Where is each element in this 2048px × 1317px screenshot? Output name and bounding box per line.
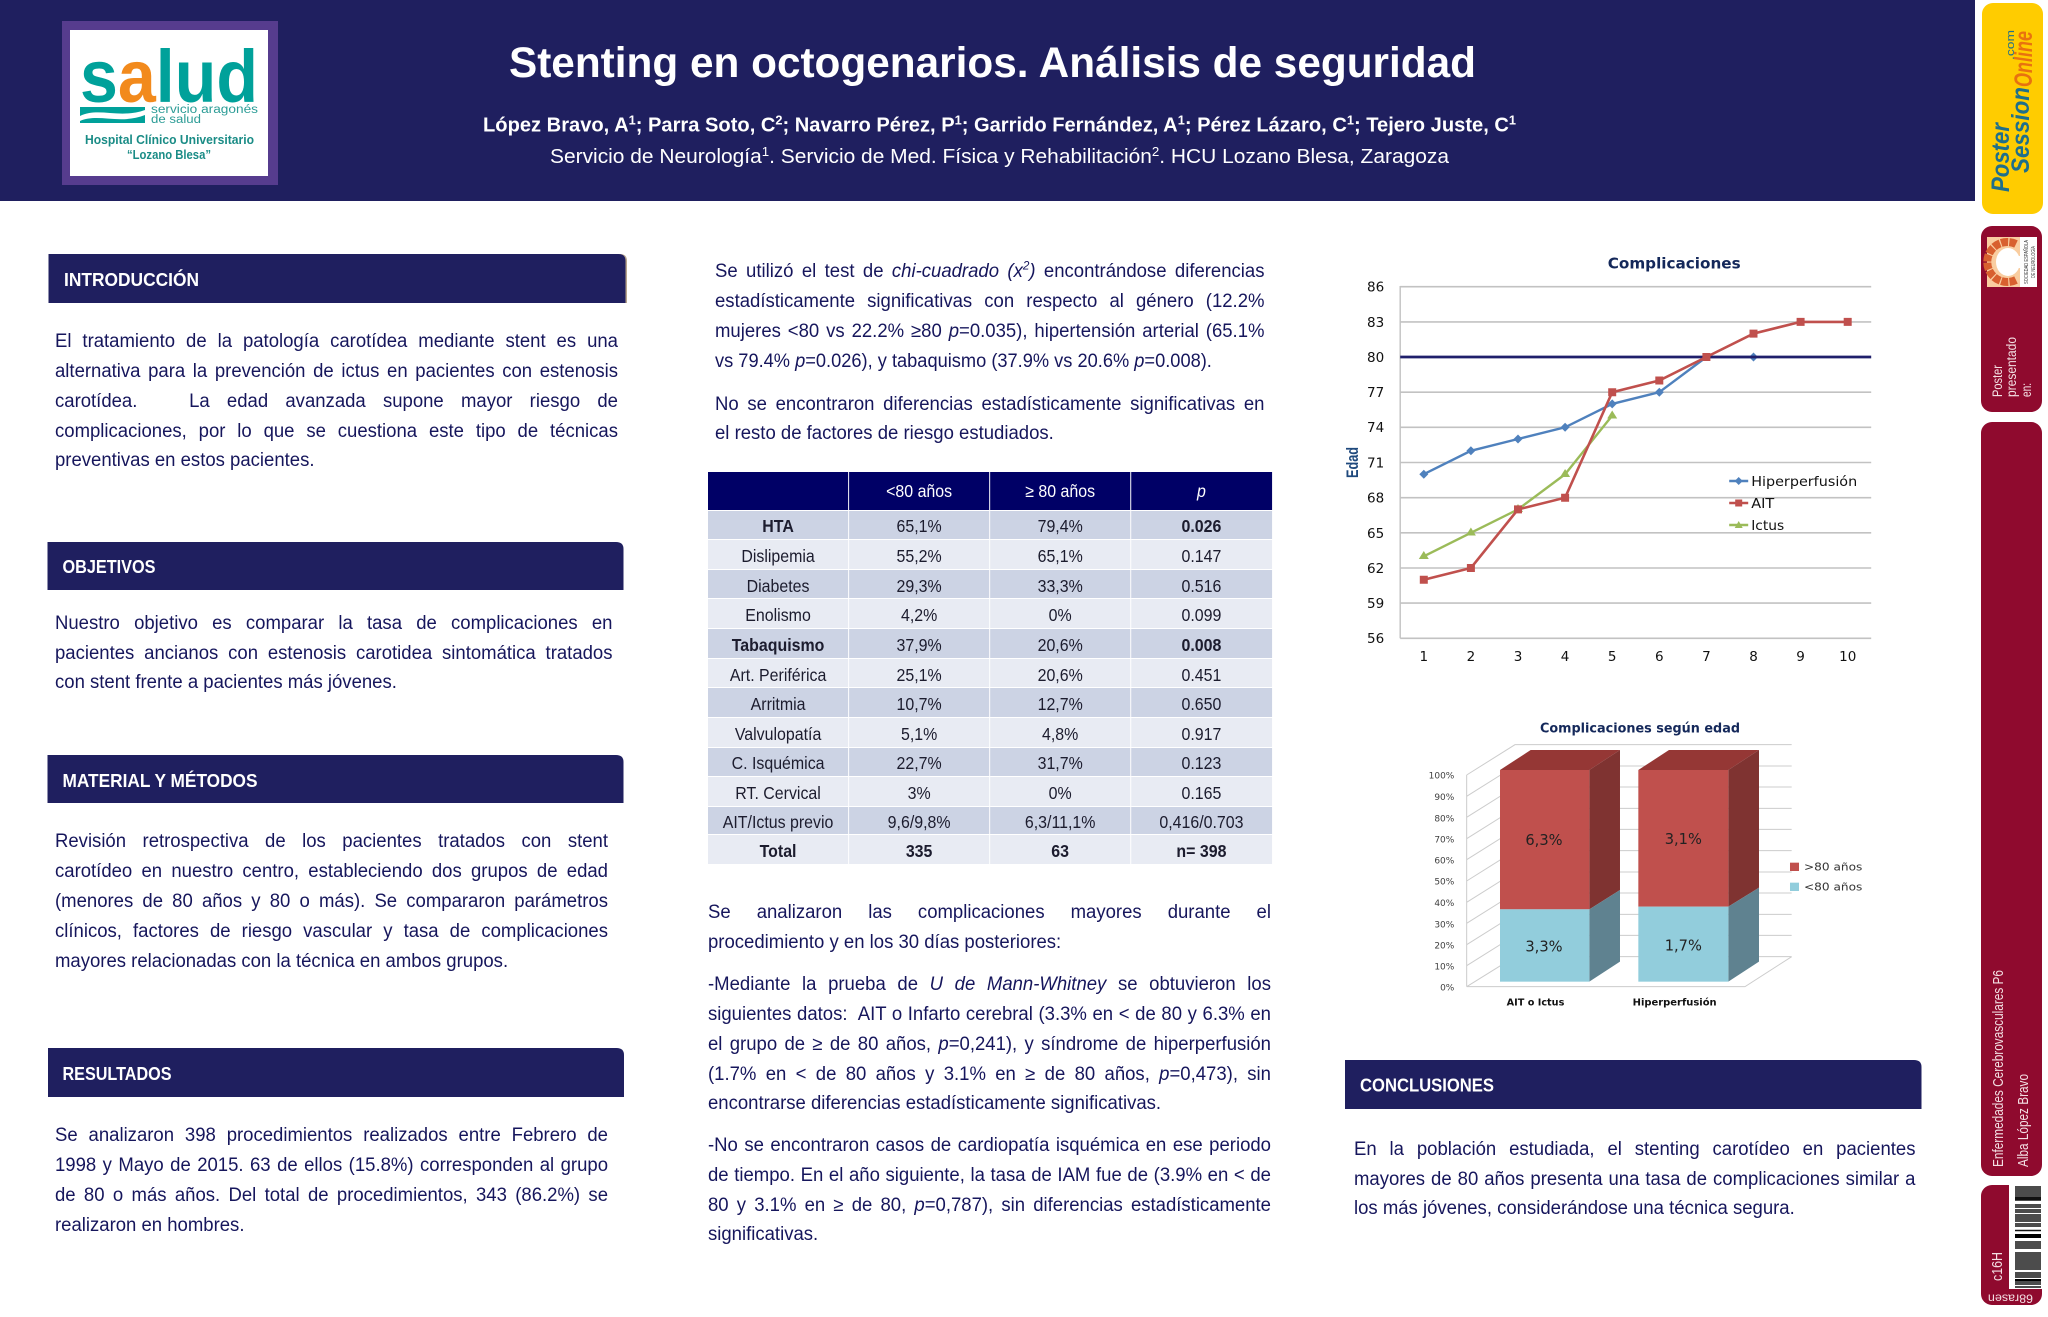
authors: 1 xyxy=(1347,112,1354,128)
table: risk factors by age group: 33,3% xyxy=(1037,576,1082,596)
sidebar: Poster Session Online badge: Session xyxy=(2007,87,2035,173)
authors: 1 xyxy=(629,112,636,128)
bar: Hiperperfusión xyxy=(1638,750,1759,982)
table: risk factors by age group: 25,1% xyxy=(896,665,941,685)
table: risk factors by age group: 0.917 xyxy=(1181,724,1221,744)
text: resultados: 1998 y Mayo de 2015. 63 de ellos (15.8%) corresponden al grupo xyxy=(55,1155,608,1176)
y axis labels: 50% xyxy=(1434,878,1455,888)
text: conclusiones: mayores de 80 años presenta una tasa de complicaciones similar a xyxy=(1354,1169,1915,1190)
icon: salud hospital logo: Hospital Clínico Universitario xyxy=(85,132,254,147)
text: introducción: preventivas en estos pacientes. xyxy=(55,450,315,471)
text: introducción: carotídea. La edad avanzada supone mayor riesgo de xyxy=(55,391,618,412)
table: risk factors by age group: ≥ 80 años xyxy=(1025,481,1095,501)
text: objetivos: Nuestro objetivo es comparar la tasa de complicaciones en xyxy=(55,613,612,634)
text: chi-cuadrado results: el resto de factores de riesgo estudiados. xyxy=(715,423,1053,444)
y axis labels: 59 xyxy=(1367,596,1384,612)
y axis labels: 60% xyxy=(1434,857,1455,867)
text: major complications: -No se encontraron casos de cardiopatía isquémica en ese periodo xyxy=(708,1135,1270,1156)
text: chi-cuadrado results: Se utilizó el test de chi-cuadrado (x2) encontrándose diferencias xyxy=(715,259,1264,282)
y axis labels: 71 xyxy=(1367,456,1384,472)
table: risk factors by age group: 63 xyxy=(1051,841,1069,861)
y axis labels: 80 xyxy=(1367,350,1384,366)
table: risk factors by age group: 5,1% xyxy=(900,724,937,744)
text: chi-cuadrado results: vs 79.4% p=0.026), y tabaquismo (37.9% vs 20.6% p=0.008). xyxy=(715,350,1212,372)
sidebar: Poster Session Online badge: Poster xyxy=(1987,122,2015,192)
y axis labels: 56 xyxy=(1367,631,1384,647)
legend: AIT xyxy=(1751,496,1775,512)
y axis labels: 90% xyxy=(1434,793,1455,803)
table: risk factors by age group: 10,7% xyxy=(896,694,941,714)
text: conclusiones: En la población estudiada, el stenting carotídeo en pacientes xyxy=(1354,1139,1915,1160)
table: risk factors by age group: 0.165 xyxy=(1181,783,1221,803)
y axis labels: 100% xyxy=(1429,772,1455,782)
bar: AIT o Ictus: 3,3% xyxy=(1525,938,1563,955)
table: risk factors by age group: Diabetes xyxy=(746,576,809,596)
table: risk factors by age group: n= 398 xyxy=(1176,841,1226,861)
authors: ; Navarro Pérez, P xyxy=(782,114,955,136)
y axis labels xyxy=(1367,280,1384,647)
text: introducción: El tratamiento de la patología carotídea mediante stent es una xyxy=(55,331,618,352)
icon: salud hospital logo: salud xyxy=(80,35,258,118)
x axis labels: 7 xyxy=(1702,649,1711,665)
authors: ; Pérez Lázaro, C xyxy=(1185,114,1347,136)
authors: 1 xyxy=(1178,112,1185,128)
text: conclusiones: los más jóvenes, considerándose una técnica segura. xyxy=(1354,1198,1794,1219)
bar: Hiperperfusión: 1,7% xyxy=(1665,937,1702,954)
authors: ; Garrido Fernández, A xyxy=(962,114,1178,136)
text: resultados xyxy=(55,1125,608,1236)
text: introducción: alternativa para la prevención de ictus en pacientes con estenosis xyxy=(55,361,618,382)
heading: objetivos xyxy=(48,542,624,590)
table: risk factors by age group: Arritmia xyxy=(750,694,805,714)
table: risk factors by age group: RT. Cervical xyxy=(735,783,820,803)
y axis labels: 62 xyxy=(1367,561,1384,577)
heading: introducción: INTRODUCCIÓN xyxy=(64,269,199,290)
heading: resultados xyxy=(48,1048,624,1097)
table: risk factors by age group: 3% xyxy=(907,783,930,803)
x axis labels: 8 xyxy=(1749,649,1758,665)
threshold line at 80 xyxy=(1400,356,1871,358)
sidebar: session and author: Alba López Bravo xyxy=(2015,1074,2032,1167)
table: risk factors by age group: 0.123 xyxy=(1181,753,1221,773)
sidebar: code and barcode: 68rasen xyxy=(1988,1292,2033,1306)
table: risk factors by age group: 335 xyxy=(905,841,932,861)
table: risk factors by age group: 22,7% xyxy=(896,753,941,773)
legend: Hiperperfusión xyxy=(1751,474,1857,490)
text: major complications xyxy=(708,902,1271,1245)
sidebar: session and author xyxy=(1981,422,2042,1176)
y axis labels: 10% xyxy=(1434,963,1455,973)
icon: salud hospital logo: de salud xyxy=(151,114,201,126)
sidebar: Poster Session Online badge xyxy=(1982,3,2043,214)
x axis labels: 4 xyxy=(1561,649,1569,665)
chart title: Complicaciones xyxy=(1608,254,1741,272)
sidebar: poster presented at xyxy=(1981,226,2042,412)
table: risk factors by age group: Total xyxy=(759,841,796,861)
text: major complications: 80 y 3.1% en ≥ de 80, p=0,787), sin diferencias estadísticamente xyxy=(708,1195,1271,1216)
sidebar: poster presented at: presentado xyxy=(2004,337,2019,397)
series: AIT xyxy=(1420,318,1852,584)
heading: conclusiones: CONCLUSIONES xyxy=(1360,1074,1494,1096)
authors: ; Parra Soto, C xyxy=(636,114,776,136)
text: major complications: Se analizaron las complicaciones mayores durante el xyxy=(708,902,1270,923)
text: chi-cuadrado results: No se encontraron diferencias estadísticamente significativas en xyxy=(715,394,1264,415)
table: risk factors by age group: 4,8% xyxy=(1042,724,1078,744)
table: risk factors by age group: 0.147 xyxy=(1181,546,1221,566)
text: material y métodos: Revisión retrospectiva de los pacientes tratados con stent xyxy=(55,831,608,852)
heading: material y métodos: MATERIAL Y MÉTODOS xyxy=(62,770,258,791)
sidebar: code and barcode: c16H xyxy=(1989,1252,2006,1281)
table: risk factors by age group: 4,2% xyxy=(900,605,937,625)
x axis labels: 10 xyxy=(1839,649,1856,665)
text: resultados: Se analizaron 398 procedimientos realizados entre Febrero de xyxy=(55,1125,608,1146)
affiliations: . HCU Lozano Blesa, Zaragoza xyxy=(1159,145,1450,168)
text: chi-cuadrado results xyxy=(715,259,1264,444)
table: risk factors by age group: 0% xyxy=(1048,783,1071,803)
sidebar: poster presented at: en: xyxy=(2019,383,2034,397)
icon: neurology society logo xyxy=(1987,237,2037,287)
category labels: Hiperperfusión xyxy=(1633,998,1717,1009)
x axis labels: 6 xyxy=(1655,649,1664,665)
text: material y métodos: (menores de 80 años y 80 o más). Se compararon parámetros xyxy=(55,891,608,912)
affiliations: 2 xyxy=(1152,144,1159,159)
y axis labels: 86 xyxy=(1367,280,1384,296)
text: introducción: complicaciones, por lo que se cuestiona este tipo de técnicas xyxy=(55,421,618,442)
text: chi-cuadrado results: estadísticamente significativas con respecto al género (12.2% xyxy=(715,291,1264,312)
y axis labels: 68 xyxy=(1367,490,1384,506)
sidebar: code and barcode xyxy=(1981,1185,2042,1306)
heading: material y métodos xyxy=(48,755,624,803)
text: major complications: siguientes datos: AIT o Infarto cerebral (3.3% en < de 80 y 6.3% en xyxy=(708,1004,1270,1025)
affiliations: 1 xyxy=(762,144,769,159)
series: hiperperfusión xyxy=(1419,352,1758,479)
table: risk factors by age group: Art. Periférica xyxy=(729,665,826,685)
bar: AIT o Ictus: 6,3% xyxy=(1525,832,1563,849)
text: major complications: de tiempo. En el año siguiente, la tasa de IAM fue de (3.9% en < de xyxy=(708,1165,1270,1186)
table: risk factors by age group: Enolismo xyxy=(745,605,810,625)
heading: objetivos: OBJETIVOS xyxy=(62,556,156,577)
table: risk factors by age group: 55,2% xyxy=(896,546,941,566)
text: major complications: -Mediante la prueba de U de Mann-Whitney se obtuvieron los xyxy=(708,974,1270,995)
text: major complications: significativas. xyxy=(708,1224,818,1245)
table: risk factors by age group: HTA xyxy=(762,516,793,536)
y axis labels: 20% xyxy=(1434,941,1455,951)
icon: neurology society logo: SOCIEDAD ESPAÑOLA xyxy=(2023,239,2030,284)
table: risk factors by age group: 29,3% xyxy=(896,576,941,596)
authors: 1 xyxy=(955,112,962,128)
y axis labels: 80% xyxy=(1434,814,1455,824)
text: objetivos: pacientes ancianos con estenosis carotidea sintomática tratados xyxy=(55,643,612,664)
table: risk factors by age group: <80 años xyxy=(886,481,952,501)
legend xyxy=(1729,474,1857,534)
table: risk factors by age group: Tabaquismo xyxy=(731,635,824,655)
text: material y métodos: mayores relacionadas con la técnica en ambos grupos. xyxy=(55,950,508,972)
y axis labels xyxy=(1429,772,1455,994)
table: risk factors by age group: 65,1% xyxy=(1037,546,1082,566)
chart: complicaciones line chart xyxy=(1344,254,1871,665)
table: risk factors by age group: 0.650 xyxy=(1181,694,1221,714)
table: risk factors by age group: AIT/Ictus previo xyxy=(722,812,833,832)
bar: AIT o Ictus xyxy=(1500,750,1620,982)
table: risk factors by age group: 65,1% xyxy=(896,516,941,536)
table: risk factors by age group: 0.008 xyxy=(1181,635,1221,655)
authors: López Bravo, A xyxy=(483,114,631,136)
bar: Hiperperfusión: 3,1% xyxy=(1665,831,1702,848)
barcode xyxy=(2015,1187,2041,1287)
y axis labels: 70% xyxy=(1434,835,1455,845)
heading: conclusiones xyxy=(1345,1060,1922,1109)
authors: 2 xyxy=(775,112,782,128)
legend: Ictus xyxy=(1751,518,1784,534)
icon: salud hospital logo xyxy=(62,21,278,185)
table: risk factors by age group: Dislipemia xyxy=(741,546,814,566)
text: material y métodos: carotídeo en nuestro centro, estableciendo dos grupos de edad xyxy=(55,861,608,882)
icon: salud hospital logo: servicio aragonés xyxy=(151,104,258,116)
text: major complications: el grupo de ≥ de 80 años, p=0,241), y síndrome de hiperperfusión xyxy=(708,1034,1270,1055)
table: risk factors by age group: 0.026 xyxy=(1181,516,1221,536)
text: material y métodos xyxy=(55,831,608,972)
authors: 1 xyxy=(1509,112,1516,128)
text: major complications: encontrarse diferencias estadísticamente significativas. xyxy=(708,1093,1161,1114)
text: conclusiones xyxy=(1354,1139,1916,1219)
text: major complications: (1.7% en < de 80 años y 3.1% en ≥ de 80 años, p=0,473), sin xyxy=(708,1064,1270,1085)
sidebar: poster presented at: Poster xyxy=(1990,365,2005,397)
text: resultados: realizaron en hombres. xyxy=(55,1215,244,1236)
table: risk factors by age group: 37,9% xyxy=(896,635,941,655)
banner xyxy=(0,0,1975,201)
x axis labels: 3 xyxy=(1514,649,1522,665)
legend: <80 años xyxy=(1804,880,1863,893)
chart title: Complicaciones según edad xyxy=(1540,720,1740,736)
table: risk factors by age group: 0.451 xyxy=(1181,665,1221,685)
y axis labels: 77 xyxy=(1367,385,1384,401)
table: risk factors by age group: 0.099 xyxy=(1181,605,1221,625)
text: major complications: procedimiento y en los 30 días posteriores: xyxy=(708,932,1061,953)
y axis labels: 30% xyxy=(1434,920,1455,930)
y axis labels: 40% xyxy=(1434,899,1455,909)
table: risk factors by age group: 0.516 xyxy=(1181,576,1221,596)
table: risk factors by age group: 6,3/11,1% xyxy=(1024,812,1095,832)
icon: neurology society logo: DE NEUROLOGÍA xyxy=(2030,245,2037,278)
legend: >80 años xyxy=(1804,860,1863,873)
table: risk factors by age group: 0,416/0.703 xyxy=(1159,812,1243,832)
table: risk factors by age group: 79,4% xyxy=(1037,516,1082,536)
series: ictus xyxy=(1419,410,1617,559)
text: material y métodos: clínicos, factores de riesgo vascular y tasa de complicaciones xyxy=(55,920,608,942)
table: risk factors by age group: 12,7% xyxy=(1037,694,1082,714)
heading: introducción xyxy=(48,254,627,303)
sidebar: Poster Session Online badge: Online xyxy=(2010,31,2038,87)
text: objetivos: con stent frente a pacientes más jóvenes. xyxy=(55,672,397,693)
heading: resultados: RESULTADOS xyxy=(62,1063,172,1084)
icon: salud hospital logo: “Lozano Blesa” xyxy=(127,147,211,162)
table: risk factors by age group: Valvulopatía xyxy=(734,724,821,744)
chart: complicaciones según edad stacked bars xyxy=(1429,720,1863,1009)
sidebar: session and author: Enfermedades Cerebrovasculares P6 xyxy=(1990,970,2007,1167)
x axis labels xyxy=(1420,649,1856,665)
affiliations: . Servicio de Med. Física y Rehabilitación xyxy=(769,145,1152,168)
text: resultados: de 80 o más años. Del total de procedimientos, 343 (86.2%) se xyxy=(55,1185,608,1206)
table: risk factors by age group: p xyxy=(1197,481,1205,501)
title: Stenting en octogenarios. Análisis de seguridad xyxy=(509,39,1476,87)
table: risk factors by age group: 31,7% xyxy=(1037,753,1082,773)
table: risk factors by age group: 20,6% xyxy=(1037,665,1082,685)
x axis labels: 1 xyxy=(1420,649,1428,665)
text: objetivos xyxy=(55,613,612,693)
x axis labels: 9 xyxy=(1796,649,1805,665)
text: chi-cuadrado results: mujeres <80 vs 22.2% ≥80 p=0.035), hipertensión arterial (65.1% xyxy=(715,321,1264,342)
table: risk factors by age group xyxy=(708,472,1272,864)
table: risk factors by age group: 9,6/9,8% xyxy=(887,812,950,832)
x axis labels: 2 xyxy=(1467,649,1475,665)
table: risk factors by age group: 0% xyxy=(1048,605,1071,625)
axis title: Edad xyxy=(1344,447,1362,478)
legend xyxy=(1790,860,1863,893)
x axis labels: 5 xyxy=(1608,649,1616,665)
y axis labels: 65 xyxy=(1367,526,1384,542)
text: introducción xyxy=(55,331,618,471)
category labels: AIT o Ictus xyxy=(1507,998,1565,1009)
y axis labels: 83 xyxy=(1367,315,1384,331)
y axis labels: 74 xyxy=(1367,420,1384,436)
sidebar: Poster Session Online badge: .com xyxy=(2005,30,2017,60)
y axis labels: 0% xyxy=(1440,984,1455,994)
table: risk factors by age group: 20,6% xyxy=(1037,635,1082,655)
category labels xyxy=(1507,998,1717,1009)
affiliations: Servicio de Neurología xyxy=(550,145,757,168)
table: risk factors by age group: C. Isquémica xyxy=(731,753,824,773)
authors: ; Tejero Juste, C xyxy=(1354,114,1509,136)
